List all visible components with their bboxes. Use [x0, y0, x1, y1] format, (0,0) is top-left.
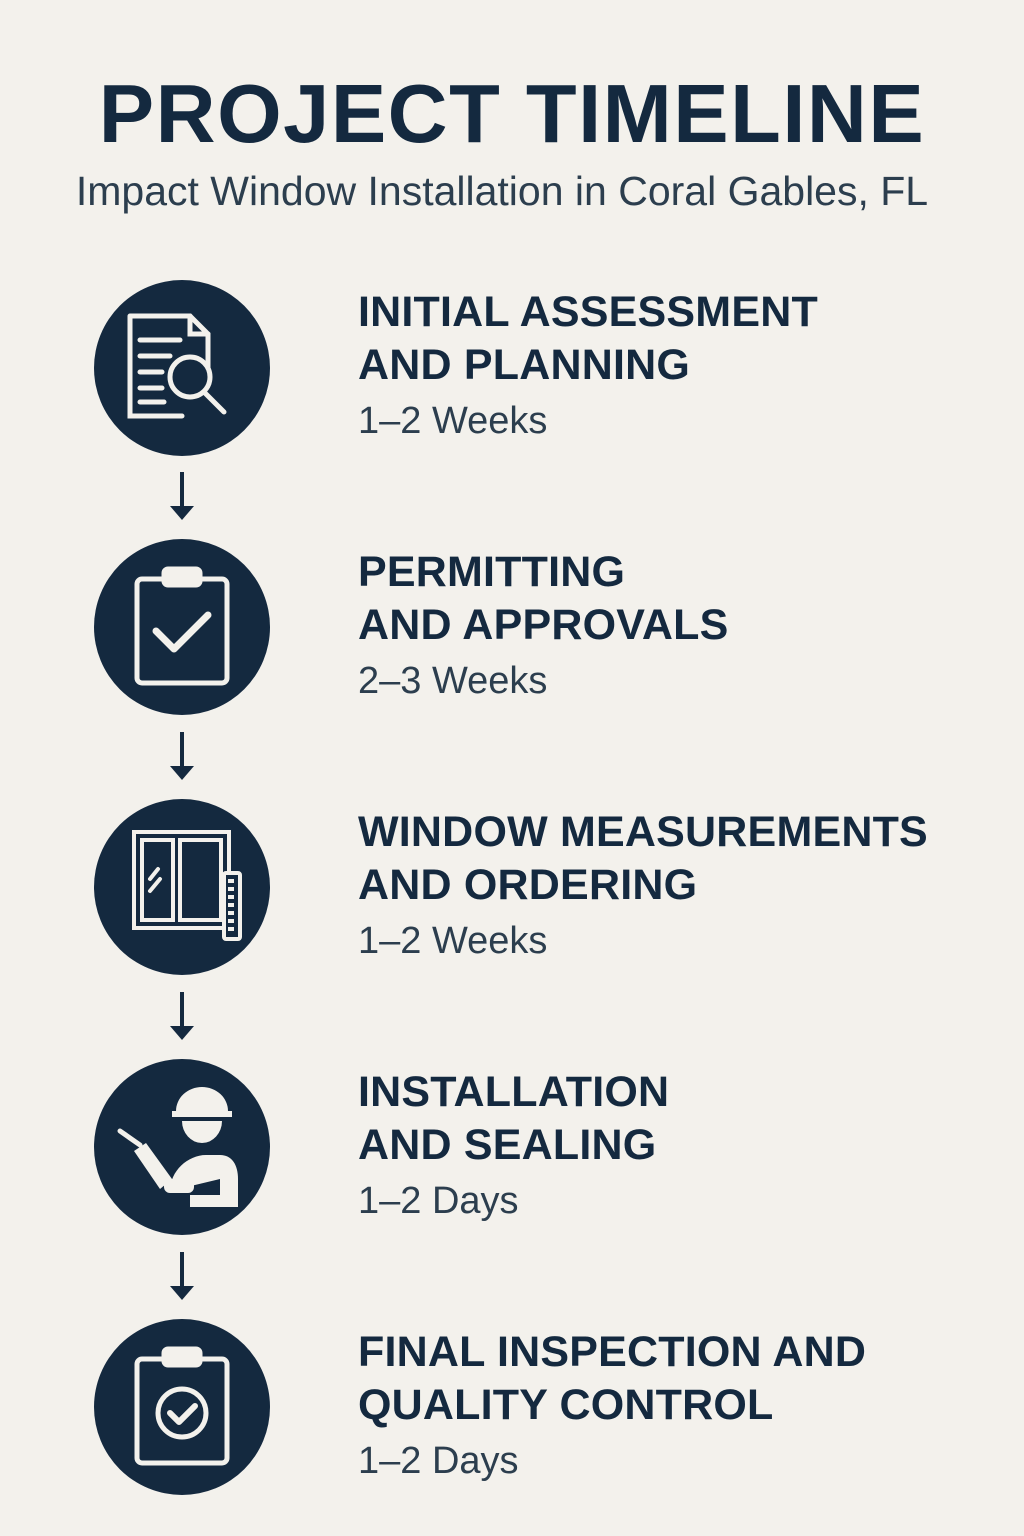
- step 2: 2–3 Weeks: [358, 660, 547, 702]
- step 5: QUALITY CONTROL: [358, 1381, 773, 1429]
- step 5: FINAL INSPECTION AND: [358, 1328, 866, 1376]
- step 5: 1–2 Days: [358, 1440, 519, 1482]
- step 1: [358, 288, 818, 442]
- step 3: AND ORDERING: [358, 861, 697, 909]
- step 4: INSTALLATION: [358, 1068, 669, 1116]
- arrow: [170, 472, 194, 520]
- step 4: 1–2 Days: [358, 1180, 519, 1222]
- step 4: AND SEALING: [358, 1121, 656, 1169]
- step 1: 1–2 Weeks: [358, 400, 547, 442]
- icon: clipboard circle check: [94, 1319, 270, 1495]
- subtitle: Impact Window Installation in Coral Gables, FL: [76, 168, 928, 214]
- icon: worker with drill: [94, 1059, 270, 1235]
- step 5: [358, 1328, 866, 1482]
- step 2: PERMITTING: [358, 548, 625, 596]
- step 4: [358, 1068, 669, 1222]
- icon: clipboard check: [94, 539, 270, 715]
- arrow: [170, 992, 194, 1040]
- step 1: AND PLANNING: [358, 341, 690, 389]
- arrow: [170, 732, 194, 780]
- step 3: WINDOW MEASUREMENTS: [358, 808, 928, 856]
- step 2: AND APPROVALS: [358, 601, 729, 649]
- title: PROJECT TIMELINE: [99, 67, 925, 160]
- step 3: 1–2 Weeks: [358, 920, 547, 962]
- step 3: [358, 808, 928, 962]
- icon: document search: [94, 280, 270, 456]
- step 2: [358, 548, 729, 702]
- step 1: INITIAL ASSESSMENT: [358, 288, 818, 336]
- arrow: [170, 1252, 194, 1300]
- icon: window and ruler: [94, 799, 270, 975]
